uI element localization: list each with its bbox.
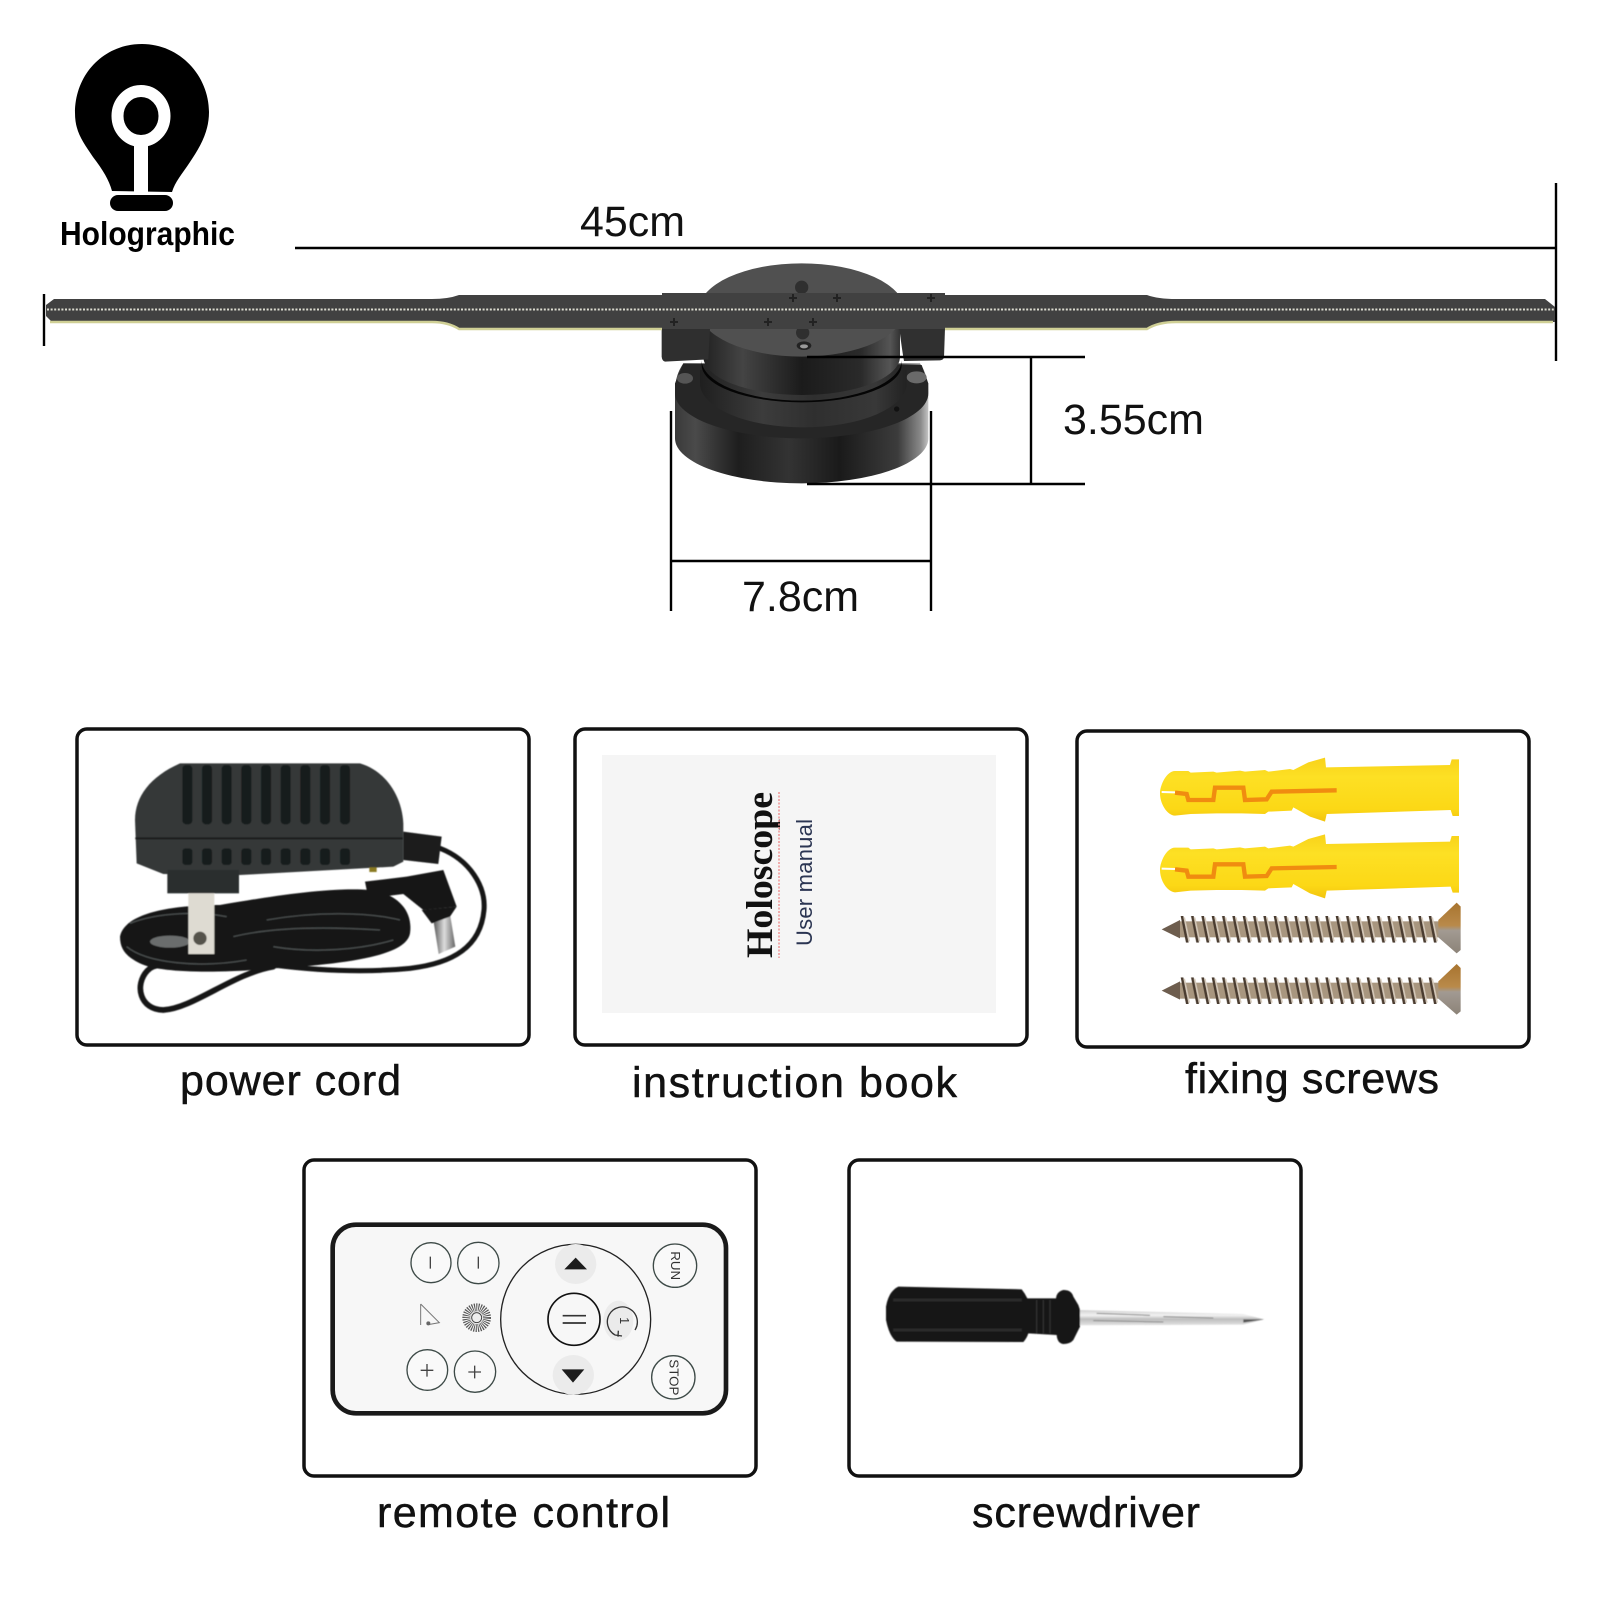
icon: remote control: RUN (668, 1251, 683, 1280)
dimension: 45cm width: 45cm (580, 198, 685, 246)
product: holographic fan base (662, 263, 945, 483)
icon: screw 1 (1162, 903, 1461, 953)
panel: screwdriver (849, 1160, 1301, 1476)
icon: wall anchor 1 (1160, 758, 1459, 822)
dimension: 7.8cm diameter: 7.8cm (742, 573, 859, 621)
dimension: 3.55cm height: 3.55cm (1063, 396, 1204, 444)
panel: remote control (304, 1160, 756, 1476)
panel: power cord (77, 729, 529, 1045)
icon: light bulb (75, 44, 209, 211)
label: screwdriver: screwdriver (972, 1489, 1200, 1537)
label: instruction book: instruction book (632, 1059, 958, 1107)
dimension: 7.8cm diameter (670, 411, 931, 621)
icon: user manual cover (602, 755, 996, 1013)
product: holographic fan blades (46, 293, 1555, 329)
logo: holographic bulb (60, 44, 235, 252)
icon: power adapter with cord (120, 763, 484, 1010)
logo wordmark: Holographic (60, 215, 235, 252)
icon: screwdriver (886, 1287, 1264, 1344)
icon: remote control (333, 1225, 726, 1413)
panel: instruction book (575, 729, 1027, 1045)
label: fixing screws: fixing screws (1185, 1055, 1439, 1103)
manual title: Holoscope (740, 792, 781, 958)
label: remote control: remote control (377, 1489, 670, 1537)
dimension: 3.55cm height (807, 357, 1204, 484)
icon: remote control: STOP (666, 1359, 681, 1395)
manual subtitle: User manual (792, 819, 817, 946)
icon: anchors and screws (1160, 758, 1461, 1015)
dimension: 45cm width (44, 183, 1556, 361)
icon: wall anchor 2 (1160, 834, 1459, 898)
label: power cord: power cord (180, 1057, 401, 1105)
icon: remote control: 1 (617, 1317, 631, 1324)
panel: fixing screws (1077, 731, 1529, 1047)
icon: screw 2 (1162, 964, 1461, 1015)
